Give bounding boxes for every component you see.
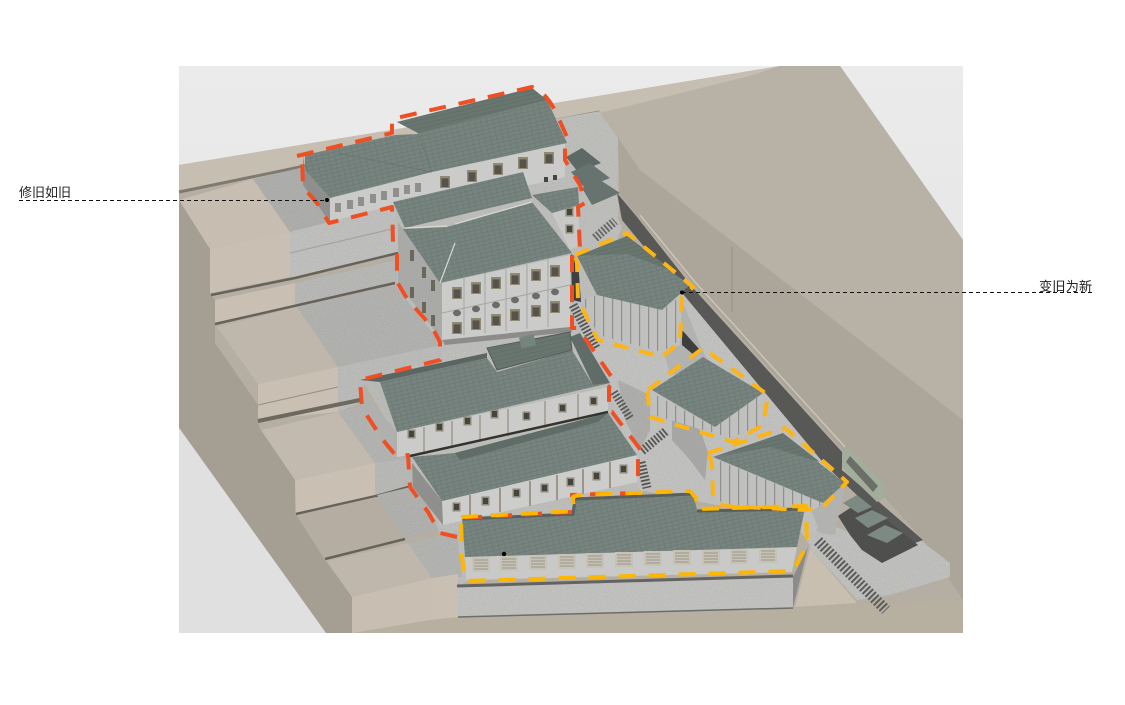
- outline: repaired as old (red dashes): [297, 87, 643, 537]
- terrain: terrace four: [297, 497, 405, 558]
- stairs between halls: [614, 392, 666, 488]
- main hall windows: [452, 287, 462, 299]
- main hall walls: [442, 255, 570, 340]
- callout dot: front gallery: [502, 552, 506, 556]
- podium wall: [457, 577, 793, 617]
- gallery roof: [462, 493, 805, 557]
- central hall roofs: [360, 353, 487, 382]
- building: long front gallery with podium wall: [457, 493, 808, 617]
- building: lower polygonal pavilion: [713, 433, 845, 511]
- shadow gap east of main hall: [571, 254, 581, 302]
- main hall roofs: [393, 172, 532, 228]
- terrain: right slope: [600, 66, 963, 420]
- small arched roofs north-east: [566, 148, 620, 205]
- north range windows: [335, 183, 421, 212]
- outline: front gallery (yellow dashes): [461, 491, 807, 581]
- south hall windows: [452, 502, 460, 512]
- outline: middle pavilion (yellow dashes): [648, 348, 768, 442]
- building: central hall with raised roof: [360, 332, 610, 457]
- north range roofs: [305, 134, 432, 198]
- terrain: terraced hillside: [179, 66, 963, 633]
- south-east stepped blocks and roofs: [838, 495, 918, 563]
- building: main two-storey hall: [393, 172, 572, 345]
- leader line: right label: [680, 290, 1092, 294]
- building: middle polygonal pavilion: [652, 357, 763, 438]
- outline: lower pavilion (yellow dashes): [708, 428, 847, 510]
- south hall walls: [442, 455, 637, 525]
- terrain: terrace five: [327, 543, 432, 597]
- central hall windows: [408, 430, 416, 438]
- building: south hall: [412, 413, 637, 525]
- terrain: terrace one: [179, 179, 290, 249]
- drainage channel: [617, 193, 923, 545]
- dark seam between central and south halls: [410, 412, 608, 456]
- terrain: terrace two: [215, 283, 295, 323]
- terrain: terrace three: [261, 412, 375, 480]
- terrain: stone courtyards: [575, 290, 950, 600]
- south hall roofs: [442, 413, 637, 501]
- terrain: forecourt: [352, 600, 963, 633]
- annex with stairs: [585, 210, 622, 240]
- central hall walls: [397, 387, 608, 457]
- building: side block behind main hall: [532, 187, 580, 250]
- label: right: 变旧为新: [1039, 279, 1092, 294]
- north range facade: [330, 143, 565, 222]
- building: north range with wing: [303, 88, 567, 222]
- south-east green tank: [842, 448, 885, 502]
- outline: east pavilion (yellow dashes): [575, 233, 693, 357]
- terrain: west side wall: [179, 200, 352, 633]
- gallery facade: [465, 547, 797, 580]
- building: east polygonal pavilion: [577, 236, 690, 352]
- terrain: central stone ground: [300, 118, 645, 585]
- leader line: left label: [19, 198, 329, 202]
- south-east long stair: [818, 541, 886, 610]
- stairs east of main hall: [573, 305, 596, 348]
- gallery grilles: [472, 557, 490, 572]
- terrain: ridge band along the top: [179, 66, 963, 633]
- east retaining walls: [664, 300, 845, 535]
- label: left: 修旧如旧: [19, 185, 71, 200]
- background plate: [179, 66, 963, 633]
